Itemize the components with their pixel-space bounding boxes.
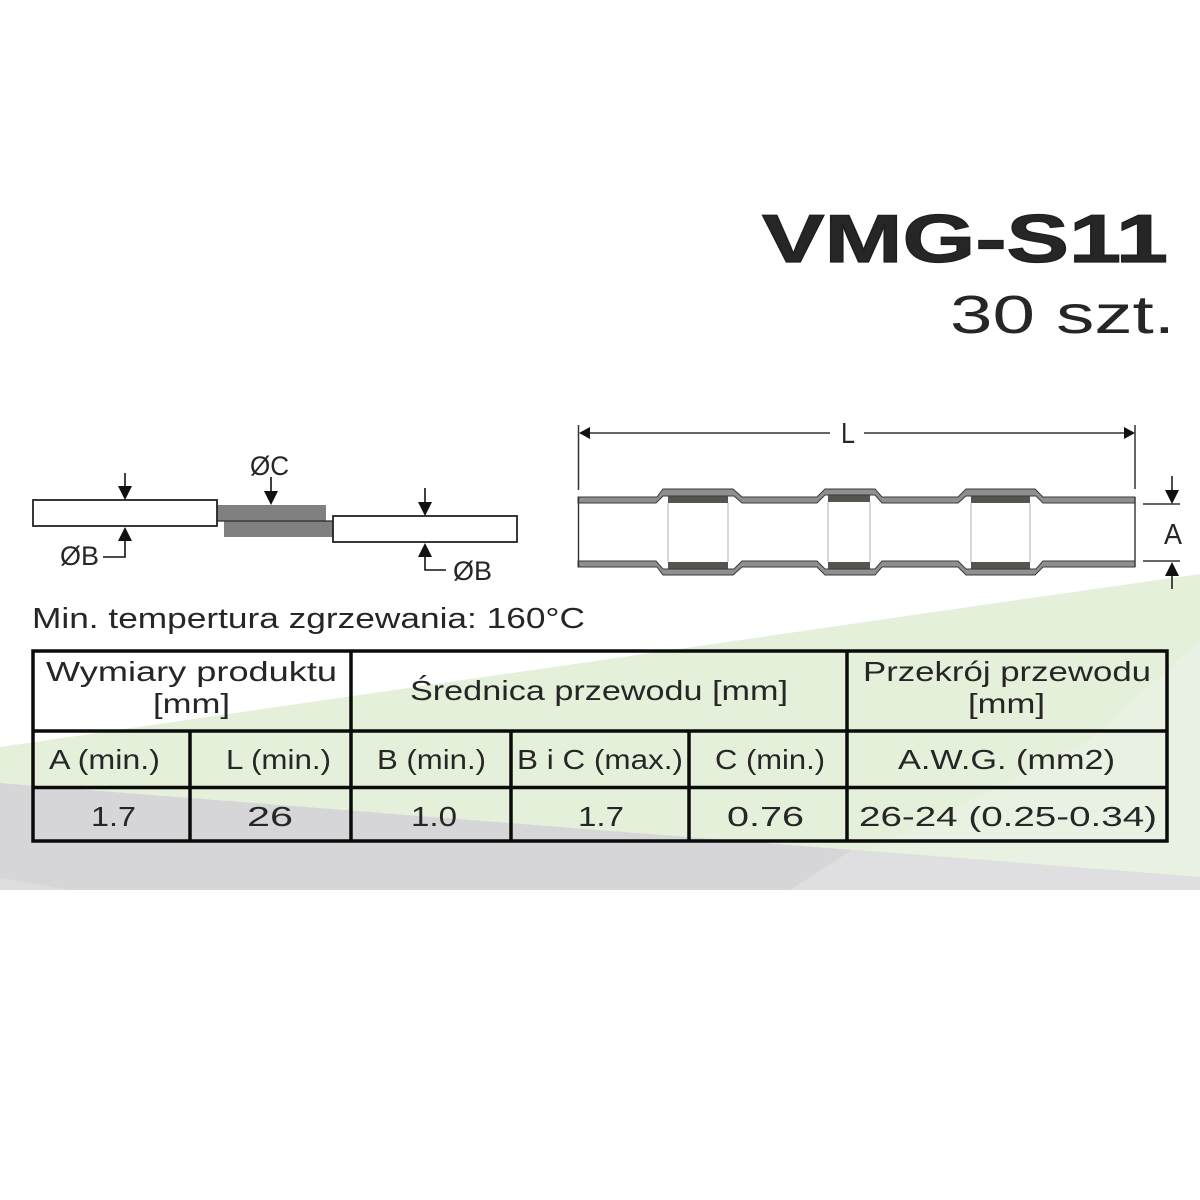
arrow: right B bottom	[418, 543, 446, 570]
header row	[46, 656, 1151, 719]
quantity: 30 szt.	[950, 285, 1175, 345]
column labels row: L (min.)	[226, 744, 331, 775]
sleeve: top wall	[578, 489, 1135, 503]
specification table	[33, 651, 1167, 841]
values row	[91, 801, 1157, 832]
wire insulation: right	[333, 516, 517, 542]
wire core: upper	[217, 505, 326, 521]
column labels row: A.W.G. (mm2)	[898, 744, 1115, 775]
dimension L: L	[841, 418, 855, 450]
diagram: connector with dimensions	[578, 418, 1183, 589]
arrow: left B top	[118, 473, 132, 500]
values row: 26	[247, 801, 293, 832]
column labels row: B i C (max.)	[517, 744, 683, 775]
header row: Średnica przewodu [mm]	[410, 674, 788, 706]
sleeve: inner edges	[668, 502, 1030, 562]
header row: [mm]	[968, 688, 1045, 719]
header row: [mm]	[153, 688, 230, 719]
column labels row: C (min.)	[715, 744, 825, 775]
dimension A: A	[1164, 519, 1183, 551]
wire insulation: left	[33, 500, 217, 526]
dimension L	[578, 418, 1135, 490]
values row: 26-24 (0.25-0.34)	[859, 801, 1157, 832]
table grid	[33, 651, 1167, 841]
wire core: lower	[224, 521, 333, 537]
diagram: wire dimensions	[33, 451, 517, 586]
dimension A	[1143, 476, 1183, 589]
sleeve: end caps	[578, 497, 1135, 567]
title: VMG-S11	[762, 201, 1168, 277]
column labels row: A (min.)	[49, 744, 160, 775]
background: green and grey wedges	[0, 574, 1200, 890]
values row: 1.0	[411, 801, 457, 832]
header row: Wymiary produktu	[46, 656, 337, 687]
wire core divider	[217, 520, 333, 522]
label: left diameter B: ØB	[60, 541, 99, 571]
column labels row: B (min.)	[377, 744, 486, 775]
arrow: C	[264, 477, 278, 505]
arrow: right B top	[418, 488, 432, 516]
temperature note: Min. tempertura zgrzewania: 160°C	[32, 603, 585, 635]
values row: 1.7	[578, 801, 624, 832]
header row: Przekrój przewodu	[863, 656, 1151, 687]
label: diameter C: ØC	[250, 451, 289, 481]
sleeve: bottom wall	[578, 561, 1135, 575]
column labels row	[49, 744, 1115, 775]
arrow: left B bottom	[103, 527, 132, 557]
values row: 1.7	[91, 801, 136, 832]
crimp bands	[668, 495, 1030, 569]
values row: 0.76	[727, 801, 804, 832]
label: right diameter B: ØB	[453, 556, 492, 586]
